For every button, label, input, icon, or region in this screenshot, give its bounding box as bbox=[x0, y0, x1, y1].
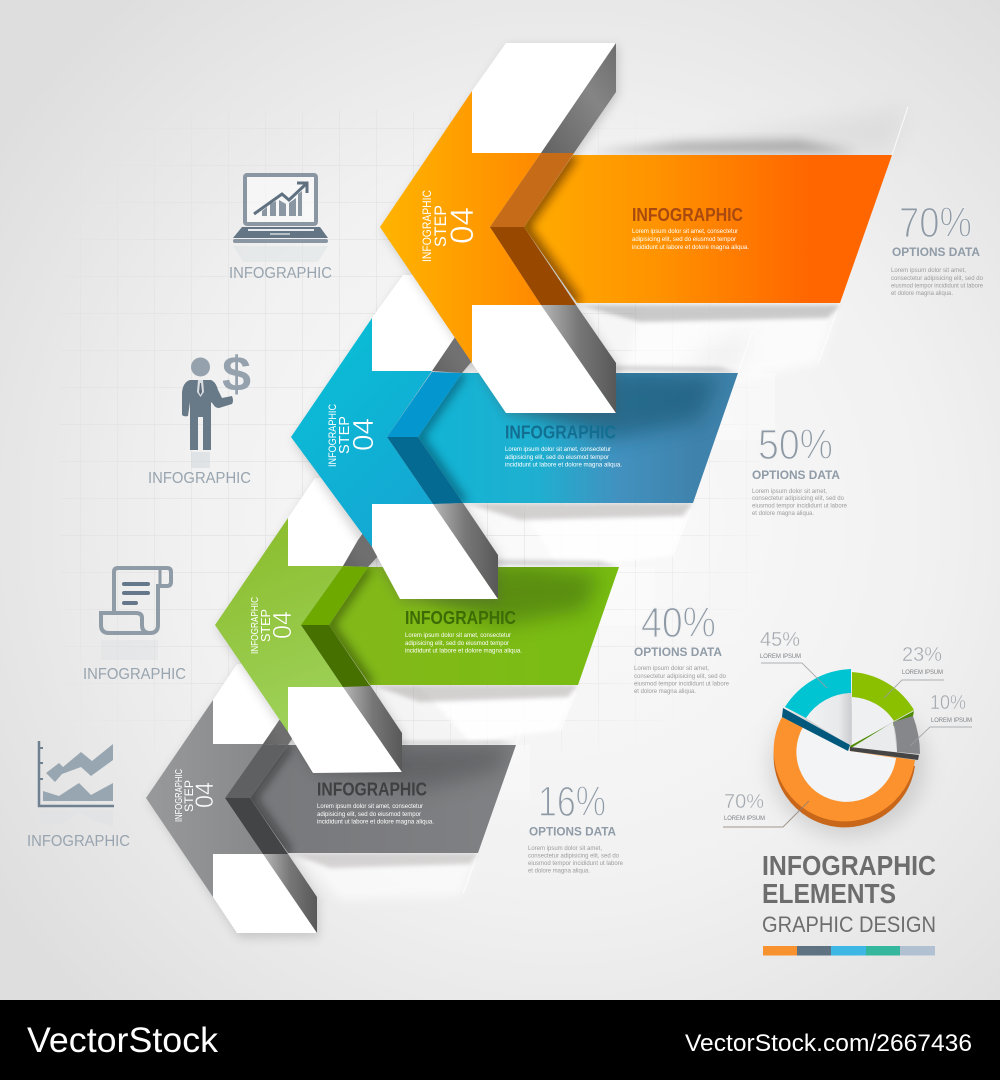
band text: incididunt ut labore et dolore magna aliqua. bbox=[405, 648, 522, 654]
arrow: orange step bbox=[380, 43, 892, 418]
band bbox=[524, 155, 892, 303]
option data 16%: et dolore magna aliqua. bbox=[528, 868, 590, 874]
step label: INFOGRAPHIC bbox=[327, 404, 339, 467]
lower wing bbox=[213, 854, 317, 933]
colour legend bar bbox=[763, 946, 935, 956]
band text: incididunt ut labore et dolore magna aliqua. bbox=[317, 818, 434, 826]
title bbox=[762, 850, 936, 937]
step label: 04 bbox=[348, 418, 380, 451]
step label bbox=[327, 404, 380, 467]
navy divider bbox=[782, 708, 850, 751]
option data 70%: OPTIONS DATA bbox=[892, 245, 980, 259]
band text: INFOGRAPHIC bbox=[632, 205, 743, 225]
option data 40%: Lorem ipsum dolor sit amet, bbox=[634, 665, 709, 672]
chevron upper bbox=[490, 153, 574, 227]
green divider bbox=[850, 711, 914, 748]
arrow head bbox=[291, 318, 433, 547]
callout 23%: 23% bbox=[902, 644, 942, 666]
arrow shadow bbox=[293, 278, 500, 604]
option data 16%: Lorem ipsum dolor sit amet, bbox=[528, 845, 602, 852]
band text: Lorem ipsum dolor sit amet, consectetur bbox=[405, 632, 511, 639]
upper wing bbox=[288, 478, 402, 566]
option data 50%: 50% bbox=[758, 421, 833, 469]
lower wing bbox=[288, 687, 402, 773]
step label: INFOGRAPHIC bbox=[250, 597, 261, 654]
callout 45% bbox=[760, 629, 827, 688]
step label: STEP bbox=[182, 780, 196, 812]
icon: laptop with chart bbox=[233, 175, 328, 262]
callout 10%: 10% bbox=[930, 692, 966, 714]
centre disc bbox=[796, 727, 896, 802]
arrow head bbox=[215, 518, 343, 732]
band text: INFOGRAPHIC bbox=[505, 422, 616, 442]
option data 40%: eiusmod tempor incididunt ut labore bbox=[634, 680, 729, 688]
option data 16% bbox=[528, 778, 623, 874]
option data 16%: OPTIONS DATA bbox=[529, 824, 616, 838]
band shadows bbox=[290, 741, 516, 868]
background grid bbox=[99, 110, 731, 745]
callout 70%: 70% bbox=[724, 791, 764, 813]
step label: STEP bbox=[431, 205, 450, 247]
band text: Lorem ipsum dolor sit amet, consectetur bbox=[317, 803, 423, 810]
arrow head bbox=[146, 700, 263, 897]
option data 16%: eiusmod tempor incididunt ut labore bbox=[528, 860, 623, 867]
title: ELEMENTS bbox=[762, 878, 896, 909]
icon: area chart bbox=[39, 741, 114, 826]
label: area chart: INFOGRAPHIC bbox=[27, 833, 130, 850]
title: INFOGRAPHIC bbox=[762, 850, 936, 881]
arrow: green step bbox=[215, 478, 619, 778]
footer image id: VectorStock.com/2667436 bbox=[685, 1030, 972, 1057]
arrow shadow bbox=[382, 46, 618, 418]
chevron upper bbox=[225, 744, 288, 798]
option data 40%: 40% bbox=[641, 599, 716, 647]
orange ring depth bbox=[774, 723, 915, 827]
label: scroll: INFOGRAPHIC bbox=[83, 666, 186, 683]
icon: businessman with dollar bbox=[182, 348, 251, 468]
pie chart bbox=[723, 629, 972, 837]
option data 70%: consectetur adipisicing elit, sed do bbox=[891, 275, 983, 282]
option data 50%: OPTIONS DATA bbox=[752, 468, 840, 482]
band text bbox=[632, 205, 749, 251]
option data 40%: consectetur adipisicing elit, sed do bbox=[634, 673, 726, 680]
band text: adipisicing elit, sed do eiusmod tempor bbox=[632, 236, 736, 243]
arrow shadow bbox=[217, 481, 404, 778]
chevron lower bbox=[301, 625, 370, 687]
lower wing bbox=[372, 504, 498, 599]
icon: businessman with dollar: $ bbox=[222, 348, 251, 402]
callout 45%: LOREM IPSUM bbox=[760, 653, 801, 660]
chevron upper bbox=[301, 566, 368, 625]
step label: 04 bbox=[267, 611, 297, 639]
label: businessman: INFOGRAPHIC bbox=[148, 470, 251, 487]
chevron lower bbox=[490, 227, 576, 305]
upper wing bbox=[472, 43, 616, 153]
band text: adipisicing elit, sed do eiusmod tempor bbox=[405, 640, 509, 647]
option data 50%: Lorem ipsum dolor sit amet, bbox=[752, 488, 827, 495]
green segment bbox=[852, 672, 914, 721]
band text: incididunt ut labore et dolore magna aliqua. bbox=[505, 462, 622, 468]
band bbox=[418, 373, 738, 503]
grey divider bbox=[850, 747, 919, 760]
band text: INFOGRAPHIC bbox=[405, 608, 516, 628]
footer wordmark: VectorStock bbox=[27, 1021, 219, 1060]
lower wing bbox=[472, 305, 616, 413]
step label: INFOGRAPHIC bbox=[174, 769, 185, 822]
option data 70%: et dolore magna aliqua. bbox=[891, 290, 953, 297]
arrow: grey step bbox=[146, 664, 516, 938]
callout 10%: LOREM IPSUM bbox=[931, 717, 972, 724]
teal segment bbox=[785, 669, 851, 718]
callout 23% bbox=[884, 644, 944, 698]
upper wing bbox=[213, 664, 317, 744]
step label: STEP bbox=[258, 609, 273, 642]
step label bbox=[174, 769, 219, 822]
band bbox=[250, 745, 516, 853]
chevron upper bbox=[387, 372, 462, 437]
option data 70%: Lorem ipsum dolor sit amet, bbox=[891, 267, 966, 274]
orange ring bbox=[774, 717, 915, 821]
callout 70%: LOREM IPSUM bbox=[724, 815, 765, 822]
footer bar bbox=[0, 1000, 1000, 1080]
band text: adipisicing elit, sed do eiusmod tempor bbox=[505, 454, 609, 461]
band shadows bbox=[578, 140, 860, 322]
option data 16%: 16% bbox=[538, 778, 606, 826]
title: GRAPHIC DESIGN bbox=[762, 912, 936, 937]
icon: scroll document bbox=[101, 568, 171, 660]
option data 50% bbox=[752, 421, 847, 517]
option data 50%: consectetur adipisicing elit, sed do bbox=[752, 495, 844, 502]
callout 10% bbox=[910, 692, 972, 746]
option data 40%: OPTIONS DATA bbox=[634, 645, 722, 659]
option data 70%: eiusmod tempor incididunt ut labore bbox=[891, 282, 983, 290]
band text bbox=[505, 422, 622, 468]
option data 70%: 70% bbox=[899, 199, 972, 247]
arrow: blue step bbox=[291, 275, 738, 604]
upper wing bbox=[372, 275, 498, 371]
band shadows bbox=[465, 365, 738, 520]
step label: 04 bbox=[191, 782, 219, 808]
step label: INFOGRAPHIC bbox=[420, 190, 434, 262]
pie shadow bbox=[770, 693, 926, 837]
paper cut slashes bbox=[300, 107, 908, 900]
band text bbox=[405, 608, 522, 654]
callout 70% bbox=[723, 791, 809, 827]
chevron lower bbox=[225, 798, 288, 854]
step label: STEP bbox=[336, 416, 353, 454]
band text: Lorem ipsum dolor sit amet, consectetur bbox=[505, 446, 611, 453]
callout 45%: 45% bbox=[760, 629, 800, 651]
arrow shadow bbox=[148, 667, 319, 938]
callout 23%: LOREM IPSUM bbox=[902, 669, 943, 676]
band bbox=[329, 567, 619, 685]
option data 70% bbox=[891, 199, 983, 297]
step label bbox=[420, 190, 480, 262]
chevron lower bbox=[387, 437, 463, 504]
band text: adipisicing elit, sed do eiusmod tempor bbox=[317, 811, 421, 818]
option data 40% bbox=[634, 599, 729, 695]
step label: 04 bbox=[444, 207, 480, 244]
step label bbox=[250, 597, 297, 654]
band text: Lorem ipsum dolor sit amet, consectetur bbox=[632, 228, 738, 235]
band shadows bbox=[372, 559, 619, 702]
option data 16%: consectetur adipisicing elit, sed do bbox=[528, 852, 619, 860]
band text: INFOGRAPHIC bbox=[317, 780, 427, 800]
arrow head bbox=[380, 91, 541, 363]
option data 50%: et dolore magna aliqua. bbox=[752, 510, 814, 517]
option data 50%: eiusmod tempor incididunt ut labore bbox=[752, 502, 847, 510]
label: laptop: INFOGRAPHIC bbox=[229, 265, 332, 282]
band text bbox=[317, 780, 434, 826]
band text: incididunt ut labore et dolore magna aliqua. bbox=[632, 244, 749, 251]
grey segment bbox=[893, 716, 920, 754]
option data 40%: et dolore magna aliqua. bbox=[634, 688, 696, 695]
